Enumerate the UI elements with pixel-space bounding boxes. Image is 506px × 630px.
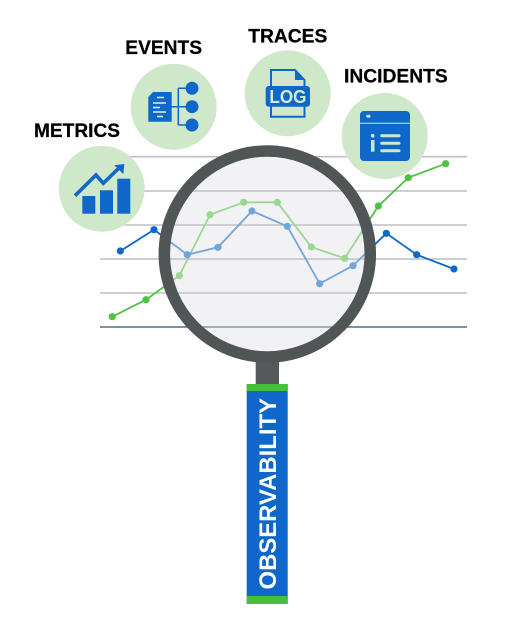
icon: traces log file — [245, 50, 331, 136]
chart: green series outside lens — [109, 160, 449, 320]
magnifying glass handle: OBSERVABILITY — [247, 384, 288, 604]
label: EVENTS: EVENTS — [125, 37, 202, 59]
icon: incidents window — [342, 93, 428, 179]
label: METRICS: METRICS — [34, 120, 120, 142]
label: INCIDENTS: INCIDENTS — [344, 66, 448, 88]
icon: events — [131, 64, 217, 150]
chart: blue series outside lens — [117, 211, 458, 284]
label: TRACES: TRACES — [248, 26, 327, 48]
magnifying glass handle: OBSERVABILITY: OBSERVABILITY — [255, 398, 282, 590]
icon: traces log file: LOG — [269, 87, 306, 107]
magnifying glass handle neck — [256, 358, 279, 386]
observability infographic — [35, 28, 467, 604]
magnified blue series — [170, 207, 365, 288]
magnifying glass lens — [158, 145, 376, 362]
icon: metrics — [59, 146, 145, 232]
magnified green series — [173, 198, 362, 281]
